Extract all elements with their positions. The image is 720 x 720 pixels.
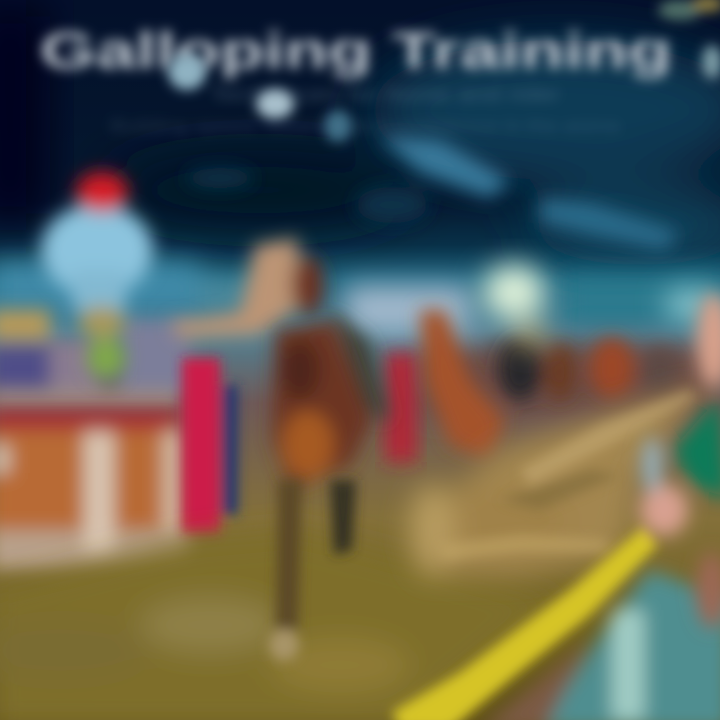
dark left sky edge <box>0 0 50 230</box>
arena floor <box>0 530 560 720</box>
foreground yellow rail <box>392 525 658 720</box>
body text line: Building speed, balance and confidence in the arena <box>110 116 621 136</box>
red gate banner <box>182 358 238 534</box>
dust streaks <box>440 390 695 560</box>
main horse and rider <box>170 238 390 661</box>
diagonal light streaks <box>186 135 680 250</box>
horse legs <box>269 480 356 661</box>
distant crowd band <box>0 262 720 415</box>
dust cloud <box>410 385 715 576</box>
subtitle: Techniques for horse and rider <box>210 84 560 106</box>
title: Galloping Training <box>40 22 672 79</box>
sparkling lights <box>168 0 720 142</box>
white spotlight glow <box>482 264 716 349</box>
red banner right of horse <box>385 352 417 462</box>
sky haze <box>110 40 720 265</box>
figure: blue mascot with red cap <box>41 172 153 378</box>
horse body <box>272 320 372 490</box>
foreground spectator <box>640 292 720 628</box>
crowd stands, multicoloured <box>0 310 190 410</box>
rider arm and torso <box>170 238 390 420</box>
foreground lower right panel <box>480 570 720 720</box>
arena fence <box>0 410 190 570</box>
background horses <box>420 310 678 460</box>
